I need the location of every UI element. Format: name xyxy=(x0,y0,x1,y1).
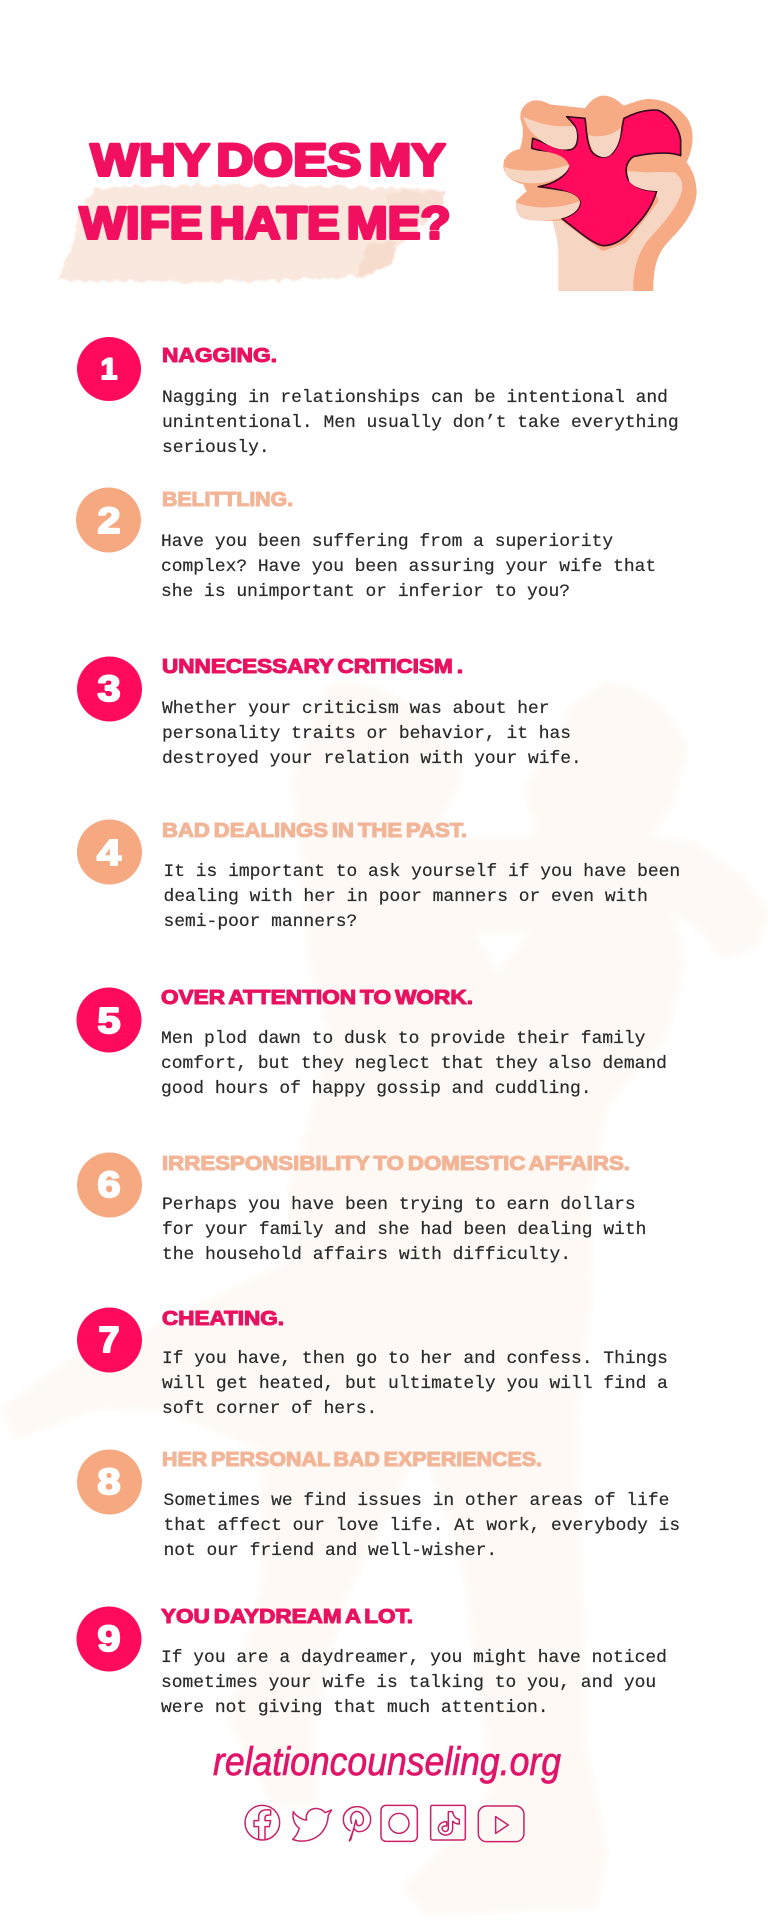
badge 2: 2 xyxy=(98,500,120,541)
item 2: belittling xyxy=(76,488,656,602)
badge 3: 3 xyxy=(98,668,120,709)
body 8: not our friend and well-wisher. xyxy=(164,1541,497,1561)
badge 9 xyxy=(76,1606,142,1672)
heading 2: BELITTLING. xyxy=(162,489,293,511)
badge 8: 8 xyxy=(98,1461,120,1502)
item 8: personal bad experiences xyxy=(77,1449,680,1561)
heading 3: UNNECESSARY CRITICISM . xyxy=(162,656,463,678)
title brush stroke xyxy=(57,185,445,282)
body 9: were not giving that much attention. xyxy=(161,1698,549,1718)
icon: pinterest xyxy=(343,1807,371,1841)
icon: youtube xyxy=(478,1806,524,1842)
item 3: unnecessary criticism xyxy=(77,656,582,769)
heading 4: BAD DEALINGS IN THE PAST. xyxy=(162,820,467,842)
body 1: Nagging in relationships can be intentional and xyxy=(162,388,668,408)
body 2: complex? Have you been assuring your wife that xyxy=(161,557,656,577)
badge 5 xyxy=(76,988,142,1052)
heading 5: OVER ATTENTION TO WORK. xyxy=(161,987,473,1009)
fingers xyxy=(504,117,687,221)
title: WIFE HATE ME? xyxy=(80,198,450,248)
body 6: for your family and she had been dealing with xyxy=(162,1220,646,1240)
icon: facebook xyxy=(245,1805,280,1840)
badge 4: 4 xyxy=(97,832,121,873)
body 8: Sometimes we find issues in other areas of life xyxy=(164,1491,669,1511)
badge 1 xyxy=(77,337,141,401)
heart xyxy=(532,110,681,246)
icon: twitter xyxy=(293,1809,332,1841)
heading 8: HER PERSONAL BAD EXPERIENCES. xyxy=(162,1449,542,1471)
body 9: sometimes your wife is talking to you, and you xyxy=(161,1673,656,1693)
body 6: Perhaps you have been trying to earn dollars xyxy=(162,1195,636,1215)
badge 9: 9 xyxy=(98,1618,120,1659)
body 3: Whether your criticism was about her xyxy=(162,699,550,719)
title xyxy=(80,134,450,248)
badge 3 xyxy=(77,656,142,722)
body 3: destroyed your relation with your wife. xyxy=(162,749,582,769)
icon: tiktok xyxy=(431,1805,465,1840)
item 1: nagging xyxy=(77,337,679,458)
badge 6: 6 xyxy=(98,1164,120,1205)
body 1: seriously. xyxy=(162,438,270,458)
badge 5: 5 xyxy=(98,1000,120,1041)
body 7: soft corner of hers. xyxy=(162,1399,377,1419)
body 7: will get heated, but ultimately you will find a xyxy=(162,1374,668,1394)
body 2: she is unimportant or inferior to you? xyxy=(161,582,570,602)
heading 1: NAGGING. xyxy=(162,345,277,367)
icon: fist squeezing heart xyxy=(503,96,697,291)
body 8: that affect our love life. At work, everybody is xyxy=(164,1516,680,1536)
item 6: irresponsibility xyxy=(77,1152,646,1265)
body 5: good hours of happy gossip and cuddling. xyxy=(161,1079,592,1099)
badge 7: 7 xyxy=(98,1319,120,1360)
body 5: comfort, but they neglect that they also demand xyxy=(161,1054,667,1074)
body 7: If you have, then go to her and confess. Things xyxy=(162,1349,668,1369)
item 7: cheating xyxy=(77,1308,668,1419)
item 9: daydream xyxy=(76,1606,667,1718)
body 5: Men plod dawn to dusk to provide their family xyxy=(161,1029,646,1049)
body 4: dealing with her in poor manners or even with xyxy=(164,887,648,907)
website url: relationcounseling.org xyxy=(213,1740,561,1784)
badge 2 xyxy=(76,488,141,552)
body 4: It is important to ask yourself if you have been xyxy=(164,862,680,882)
body 1: unintentional. Men usually don’t take everything xyxy=(162,413,679,433)
icon: instagram xyxy=(381,1805,417,1841)
title: WHY DOES MY xyxy=(90,134,446,186)
heading 6: IRRESPONSIBILITY TO DOMESTIC AFFAIRS. xyxy=(162,1153,630,1175)
background silhouette xyxy=(7,687,765,1910)
social icons xyxy=(245,1805,524,1842)
heading 9: YOU DAYDREAM A LOT. xyxy=(161,1606,413,1628)
item 4: bad dealings xyxy=(77,820,680,932)
heading 7: CHEATING. xyxy=(162,1308,284,1330)
badge 4 xyxy=(77,820,142,884)
body 2: Have you been suffering from a superiority xyxy=(161,532,613,552)
body 4: semi-poor manners? xyxy=(164,912,357,932)
body 9: If you are a daydreamer, you might have noticed xyxy=(161,1648,667,1668)
badge 8 xyxy=(77,1450,142,1514)
badge 7 xyxy=(77,1308,142,1372)
item 5: over attention to work xyxy=(76,987,667,1099)
body 3: personality traits or behavior, it has xyxy=(162,724,571,744)
badge 6 xyxy=(77,1152,142,1218)
badge 1: 1 xyxy=(101,353,117,386)
body 6: the household affairs with difficulty. xyxy=(162,1245,571,1265)
